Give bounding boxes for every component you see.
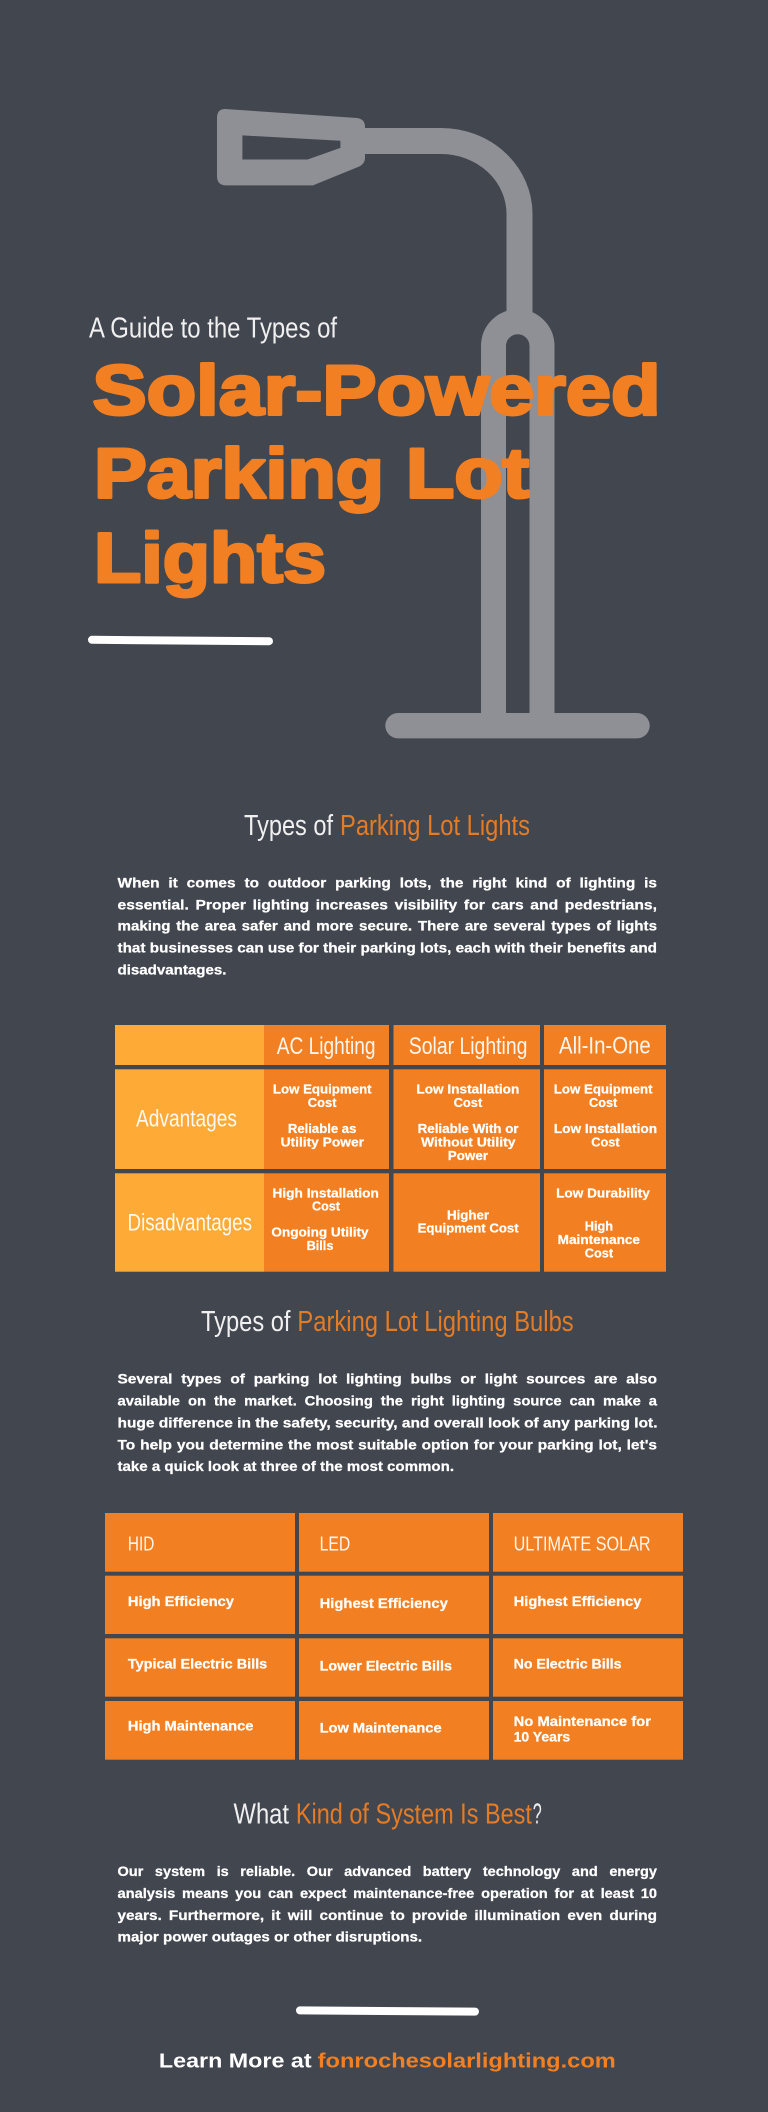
- bulb table header row: LED: [320, 1533, 350, 1555]
- table row: advantages: Advantages: [136, 1106, 237, 1133]
- text block: intro to parking lot lights: making the area safer and more secure. There are several types of lights: [118, 918, 657, 933]
- text block: intro to lighting bulbs: available on the market. Choosing the right lighting source can make a: [118, 1394, 658, 1409]
- table row: disadvantages: Maintenance: [558, 1232, 640, 1247]
- bulb table row: efficiency: High Efficiency: [128, 1594, 234, 1609]
- table row: disadvantages: Equipment Cost: [418, 1221, 519, 1236]
- heading: types of parking lot lighting bulbs: [201, 1306, 574, 1338]
- table row: advantages: Low Equipment: [554, 1082, 653, 1097]
- subtitle: A Guide to the Types of: [89, 313, 338, 345]
- bulb table row: maintenance: No Maintenance for: [514, 1714, 652, 1729]
- table row: disadvantages: Low Durability: [556, 1185, 651, 1200]
- table row: advantages: Low Equipment: [273, 1082, 372, 1097]
- bulb table header row: ULTIMATE SOLAR: [514, 1533, 651, 1555]
- table row: advantages: [115, 1069, 666, 1169]
- table header row: Solar Lighting: [409, 1033, 527, 1060]
- text block: intro to lighting bulbs: Several types of parking lot lighting bulbs or light sources are also: [118, 1372, 657, 1387]
- heading: types of parking lot lights: Parking Lot Lights: [340, 810, 530, 842]
- bulb table row: electric bills: Typical Electric Bills: [128, 1656, 268, 1671]
- heading: types of parking lot lighting bulbs: Types of: [201, 1306, 291, 1338]
- table row: advantages: Low Installation: [554, 1121, 657, 1136]
- bulb table row: maintenance: [105, 1701, 683, 1760]
- table row: advantages: Utility Power: [281, 1134, 364, 1149]
- bulb table row: electric bills: [105, 1638, 683, 1697]
- table row: advantages: Reliable With or: [418, 1121, 519, 1136]
- bulb table header row: HID: [128, 1533, 154, 1555]
- text block: intro to parking lot lights: [118, 875, 657, 978]
- text block: system reliability: [118, 1864, 658, 1944]
- text block: system reliability: major power outages or other disruptions.: [118, 1929, 422, 1944]
- table row: disadvantages: [115, 1173, 666, 1272]
- table header row: [115, 1025, 666, 1065]
- bulb table row: efficiency: [105, 1576, 683, 1634]
- bulb table row: maintenance: 10 Years: [514, 1730, 571, 1745]
- main title: Parking Lot: [94, 434, 529, 512]
- text block: intro to lighting bulbs: To help you determine the most suitable option for your parking lot, let's: [118, 1438, 657, 1453]
- table header row: All-In-One: [559, 1032, 651, 1059]
- text block: intro to parking lot lights: When it comes to outdoor parking lots, the right kind of lighting is: [118, 875, 657, 890]
- table row: advantages: Reliable as: [288, 1121, 356, 1136]
- bulb table row: efficiency: Highest Efficiency: [514, 1594, 642, 1609]
- bulb table row: electric bills: Lower Electric Bills: [320, 1658, 452, 1673]
- table row: advantages: Power: [448, 1148, 488, 1163]
- table row: disadvantages: Ongoing Utility: [271, 1225, 370, 1240]
- title underline bar: [92, 640, 269, 641]
- bulb table row: maintenance: High Maintenance: [128, 1719, 254, 1734]
- footer call to action: [159, 2050, 616, 2072]
- main title: Lights: [94, 518, 326, 597]
- table row: advantages: Without Utility: [421, 1134, 516, 1149]
- table row: disadvantages: Bills: [307, 1238, 333, 1253]
- table row: disadvantages: Cost: [312, 1199, 341, 1214]
- table header row: AC Lighting: [277, 1033, 376, 1060]
- footer call to action: fonrochesolarlighting.com: [318, 2050, 616, 2072]
- table row: disadvantages: Cost: [585, 1246, 614, 1261]
- table row: advantages: Cost: [589, 1095, 618, 1110]
- main title: Solar-Powered: [92, 350, 660, 430]
- heading: types of parking lot lights: [244, 810, 530, 842]
- bulb table row: maintenance: Low Maintenance: [320, 1721, 442, 1736]
- text block: intro to lighting bulbs: take a quick look at three of the most common.: [118, 1459, 454, 1474]
- bulb table header row: [105, 1513, 683, 1572]
- table row: disadvantages: Higher: [447, 1207, 489, 1222]
- bulb table row: efficiency: Highest Efficiency: [320, 1596, 448, 1611]
- text block: system reliability: analysis means you can expect maintenance-free operation for at least 10: [118, 1886, 657, 1901]
- heading: what kind of system is best: [234, 1798, 542, 1830]
- footer call to action: Learn More at: [159, 2050, 312, 2072]
- heading: types of parking lot lighting bulbs: Parking Lot Lighting Bulbs: [297, 1306, 574, 1338]
- text block: intro to lighting bulbs: [118, 1372, 658, 1474]
- heading: what kind of system is best: What: [234, 1798, 289, 1830]
- text block: intro to parking lot lights: that businesses can use for their parking lots, each with their benefits and: [118, 940, 657, 955]
- text block: system reliability: Our system is reliable. Our advanced battery technology and energy: [118, 1864, 658, 1879]
- table row: advantages: Cost: [591, 1134, 620, 1149]
- bulb table row: electric bills: No Electric Bills: [514, 1656, 622, 1671]
- footer divider bar: [300, 2010, 475, 2012]
- heading: what kind of system is best: ?: [533, 1798, 542, 1830]
- table row: disadvantages: High Installation: [272, 1185, 379, 1200]
- text block: intro to lighting bulbs: huge difference in the safety, security, and overall look of any parking lot.: [118, 1416, 658, 1431]
- table row: disadvantages: High: [585, 1219, 613, 1234]
- text block: system reliability: years. Furthermore, it will continue to provide illumination even during: [118, 1908, 657, 1923]
- table row: advantages: Cost: [308, 1095, 337, 1110]
- heading: what kind of system is best: Kind of System Is Best: [296, 1798, 532, 1830]
- icon: parking lot lamp post: [217, 109, 637, 726]
- table: lighting advantages and disadvantages: [115, 1025, 666, 1272]
- title block: [89, 313, 660, 597]
- table row: disadvantages: Disadvantages: [128, 1210, 252, 1237]
- text block: intro to parking lot lights: essential. Proper lighting increases visibility for cars and pedestrians,: [118, 897, 657, 912]
- main title: [92, 350, 660, 597]
- text block: intro to parking lot lights: disadvantages.: [118, 963, 226, 978]
- table: bulb comparison: [105, 1513, 683, 1760]
- table row: advantages: Cost: [454, 1095, 483, 1110]
- heading: types of parking lot lights: Types of: [244, 810, 334, 842]
- table row: advantages: Low Installation: [416, 1082, 519, 1097]
